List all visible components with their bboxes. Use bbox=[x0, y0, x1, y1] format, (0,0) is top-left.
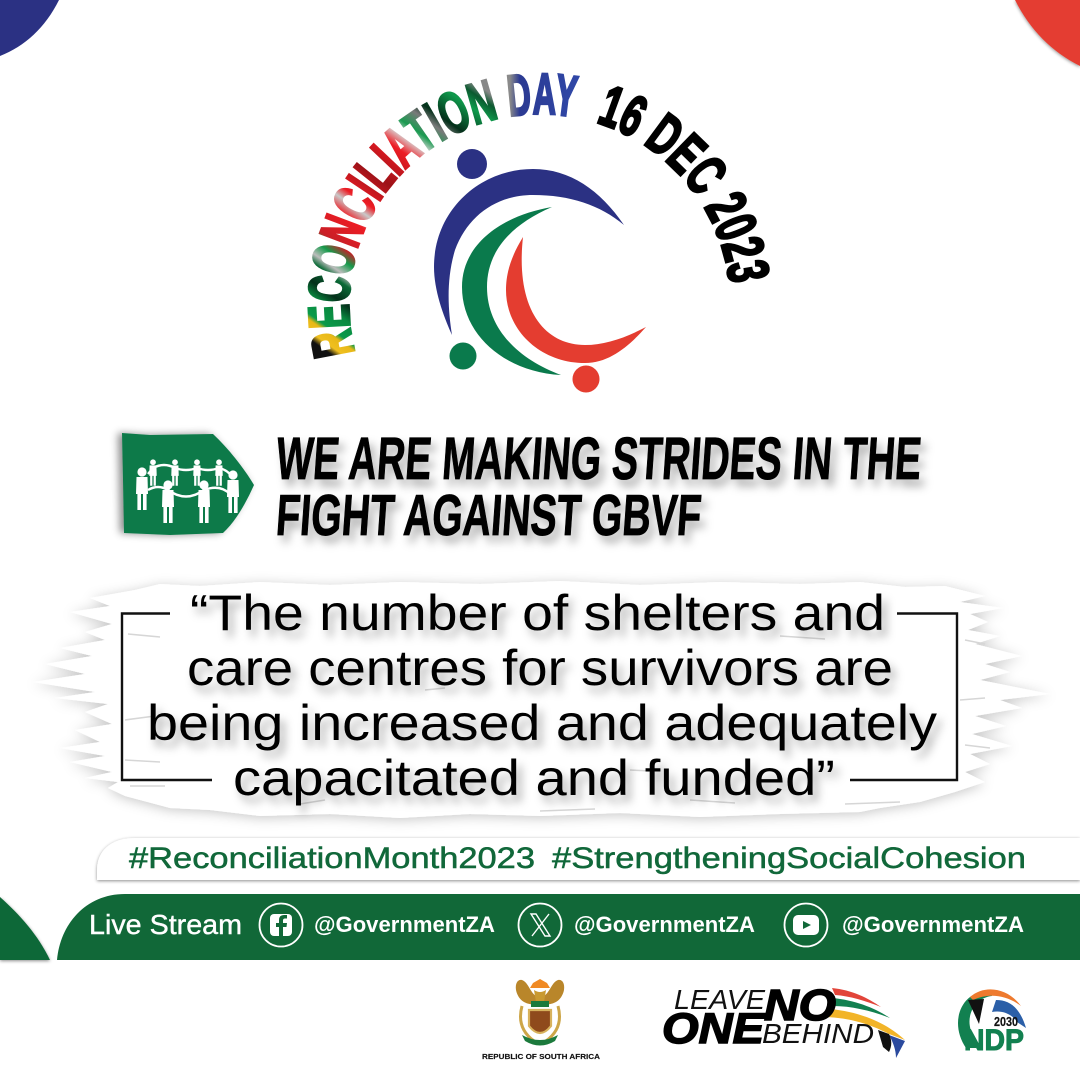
panel: hashtags: #ReconciliationMonth2023 bbox=[129, 842, 535, 875]
icon: YouTube bbox=[784, 904, 828, 946]
quote text: care centres for survivors are bbox=[187, 640, 893, 696]
panel: live stream bar: @GovernmentZA bbox=[842, 912, 1024, 937]
icon: X bbox=[518, 904, 562, 946]
panel: hashtags: #StrengtheningSocialCohesion bbox=[552, 842, 1026, 875]
corner: top-left blue bbox=[0, 0, 59, 56]
panel: live stream bar: @GovernmentZA bbox=[574, 912, 755, 937]
quote text: “The number of shelters and bbox=[190, 585, 885, 641]
logo: Leave No One Behind: BEHIND bbox=[762, 1018, 874, 1049]
quote text: capacitated and funded” bbox=[233, 750, 835, 806]
heading bbox=[274, 425, 924, 548]
icon: green tag with ring of children bbox=[122, 433, 254, 535]
curved title: RECONCILIATION bbox=[307, 78, 498, 360]
corner: top-right red bbox=[1015, 0, 1080, 66]
panel: live stream bar: @GovernmentZA bbox=[314, 912, 495, 937]
frame: quote brackets bbox=[122, 614, 957, 780]
logo: Leave No One Behind: NO bbox=[764, 981, 836, 1030]
quote text bbox=[147, 585, 937, 806]
logo: NDP 2030: NDP bbox=[964, 1024, 1024, 1057]
curved title bbox=[307, 72, 770, 360]
corner: bottom-left green bbox=[0, 897, 50, 960]
curved title: 16 DEC 2023 bbox=[596, 86, 770, 282]
quote text: being increased and adequately bbox=[147, 695, 937, 751]
heading: FIGHT AGAINST GBVF bbox=[274, 483, 704, 548]
logo: Leave No One Behind: ONE bbox=[662, 1005, 765, 1053]
panel: live stream bar: Live Stream bbox=[89, 909, 242, 940]
logo: coat of arms bbox=[482, 979, 601, 1061]
panel: torn paper quote background bbox=[33, 581, 1050, 818]
logo: NDP 2030 bbox=[958, 989, 1026, 1057]
logo: NDP 2030: 2030 bbox=[994, 1014, 1018, 1029]
caption: REPUBLIC OF SOUTH AFRICA bbox=[482, 1052, 601, 1061]
logo: reconciliation people bbox=[434, 149, 646, 392]
logo: Leave No One Behind: LEAVE bbox=[674, 984, 765, 1015]
icon: facebook bbox=[260, 904, 302, 946]
panel: live stream bar bbox=[57, 894, 1080, 960]
panel: hashtags bbox=[97, 838, 1080, 880]
curved title: DAY bbox=[506, 72, 580, 118]
logo: Leave No One Behind bbox=[662, 981, 905, 1058]
